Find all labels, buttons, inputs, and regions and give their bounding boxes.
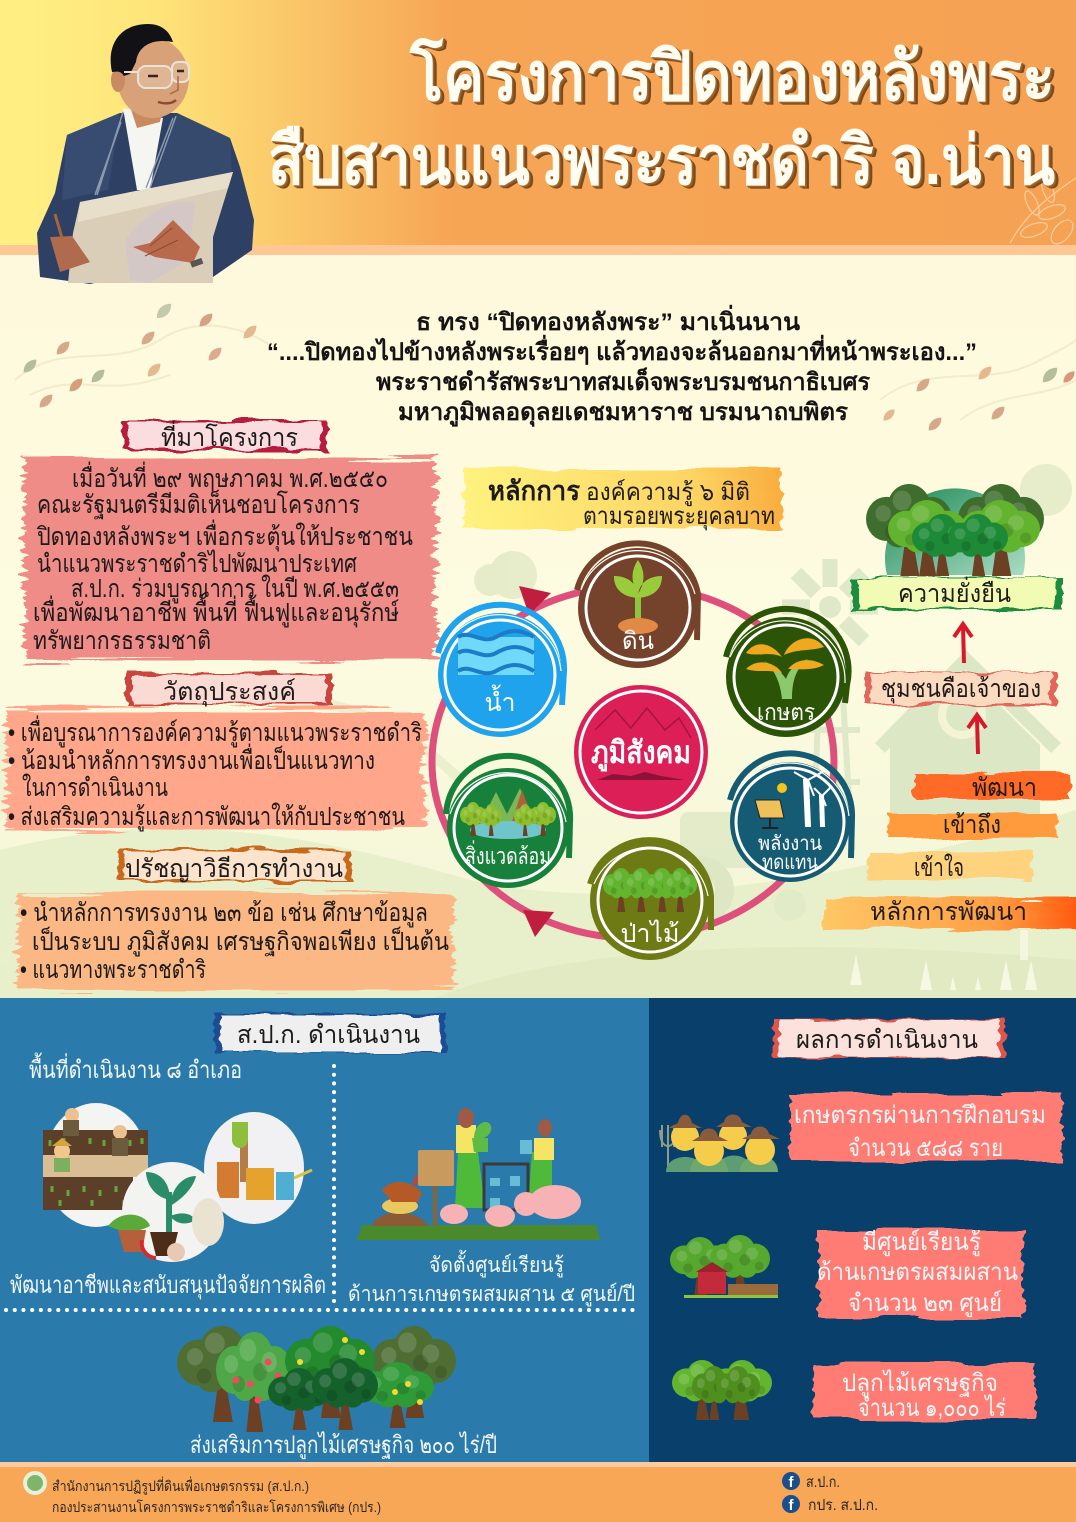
circle: agriculture: เกษตร [757, 699, 815, 725]
panel: project origin text: เมื่อวันที่ ๒๙ พฤษภาคม พ.ศ.๒๕๕๐ [72, 461, 388, 493]
sustainability trees [866, 484, 1044, 576]
text: learning centers: จัดตั้งศูนย์เรียนรู้ [429, 1250, 564, 1278]
decorative leaves left [15, 304, 270, 407]
social: ALRO facebook: ส.ป.ก. [806, 1474, 840, 1491]
royal quote: “....ปิดทองไปข้างหลังพระเรื่อยๆ แล้วทองจะล้นออกมาที่หน้าพระเอง...” [267, 334, 977, 366]
heading: project origin: ที่มาโครงการ [161, 420, 298, 452]
callout: trained farmers: เกษตรกรผ่านการฝึกอบรม [794, 1102, 1046, 1129]
bar: understand [868, 853, 1032, 882]
banner: sustainability: ความยั่งยืน [898, 576, 1011, 608]
banner: sustainability [851, 576, 1063, 610]
text: economic trees: ส่งเสริมการปลูกไม้เศรษฐกิจ ๒๐๐ ไร่/ปี [190, 1431, 497, 1460]
ring connecting six dimensions [432, 586, 834, 938]
icon: barn and trees [670, 1235, 778, 1298]
social: KPR facebook: f [788, 1497, 794, 1514]
icon: trees [672, 1360, 772, 1420]
royal quote: พระราชดำรัสพระบาทสมเด็จพระบรมชนกาธิเบศร [376, 367, 870, 396]
circle: renewable energy: พลังงาน [758, 833, 822, 855]
callout: learning centers result [817, 1228, 1024, 1318]
panel: results [649, 998, 1076, 1462]
heading: ALRO operations [214, 1013, 446, 1053]
text: organization names: กองประสานงานโครงการพระราชดำริและโครงการพิเศษ (กปร.) [52, 1499, 381, 1515]
text: organization names: สำนักงานการปฏิรูปที่ดินเพื่อเกษตรกรรม (ส.ป.ก.) [52, 1477, 309, 1495]
icon: farmers [660, 1114, 780, 1172]
royal quote: ธ ทรง “ปิดทองหลังพระ” มาเนิ่นนาน [416, 304, 801, 336]
circle: geo-social center [574, 685, 708, 819]
heading: working philosophy: ปรัชญาวิธีการทำงาน [125, 855, 343, 883]
circle: soil [577, 543, 698, 668]
panel: working philosophy text: • นำหลักการทรงงาน ๒๓ ข้อ เช่น ศึกษาข้อมูล [20, 899, 428, 928]
circle: soil: ดิน [622, 628, 654, 655]
heading: project origin [122, 420, 328, 452]
panel: objectives text: • ส่งเสริมความรู้และการพัฒนาให้กับประชาชน [8, 802, 405, 832]
text: livelihood support: พัฒนาอาชีพและสนับสนุนปัจจัยการผลิต [10, 1272, 326, 1300]
dotted dividers [6, 1066, 636, 1310]
royal quote [267, 304, 977, 428]
title [268, 37, 1055, 199]
banner: community owns: ชุมชนคือเจ้าของ [881, 675, 1041, 704]
page background [0, 0, 1076, 1000]
callout: trained farmers [790, 1094, 1062, 1162]
bar: access [888, 811, 1056, 839]
circle: environment [446, 756, 570, 888]
panel: project origin text: คณะรัฐมนตรีมีมติเห็นชอบโครงการ [37, 489, 360, 519]
panel: objectives text: • เพื่อบูรณาการองค์ความรู้ตามแนวพระราชดำริ [8, 715, 422, 748]
heading: six dimensions principle: ตามรอยพระยุคลบาท [583, 503, 775, 531]
callout: learning centers result: มีศูนย์เรียนรู้ [862, 1228, 981, 1257]
heading: results: ผลการดำเนินงาน [796, 1026, 978, 1054]
bar: development principles [824, 897, 1076, 929]
illustration: farm tools [204, 1112, 312, 1224]
bar: development principles: หลักการพัฒนา [870, 898, 1027, 926]
heading: six dimensions principle: องค์ความรู้ ๖ มิติ [586, 478, 750, 507]
background farm scene [0, 464, 1076, 1000]
social: ALRO facebook [782, 1472, 840, 1491]
text: operating area: พื้นที่ดำเนินงาน ๘ อำเภอ [29, 1052, 242, 1084]
callout: learning centers result: ด้านเกษตรผสมผสาน [817, 1259, 1018, 1286]
callout: learning centers result: จำนวน ๒๓ ศูนย์ [848, 1289, 1002, 1318]
panel: project origin text: ส.ป.ก. ร่วมบูรณาการ ในปี พ.ศ.๒๕๕๓ [71, 574, 399, 604]
circle: agriculture [726, 609, 849, 737]
heading: objectives [126, 673, 332, 707]
text: organization names [52, 1477, 381, 1515]
social: KPR facebook: กปร. ส.ป.ก. [808, 1497, 878, 1514]
panel: project origin text: นำแนวพระราชดำริไปพัฒนาประเทศ [37, 549, 357, 578]
header band [0, 0, 1076, 255]
footer band [0, 1462, 1076, 1522]
circle: renewable energy [730, 753, 852, 882]
heading: six dimensions principle: หลักการ [488, 476, 580, 506]
heading: results [773, 1019, 1005, 1058]
arrow: up to sustainability [954, 624, 972, 663]
bar: develop: พัฒนา [972, 774, 1037, 802]
royal quote: มหาภูมิพลอดุลยเดชมหาราช บรมนาถบพิตร [398, 399, 848, 428]
circle: renewable energy: ทดแทน [762, 852, 818, 874]
portrait photo [37, 24, 254, 284]
panel: project origin text [24, 458, 436, 660]
panel: project origin text: เพื่อพัฒนาอาชีพ พื้นที่ ฟื้นฟูและอนุรักษ์ [33, 594, 400, 628]
bar: understand: เข้าใจ [914, 853, 964, 882]
heading: objectives: วัตถุประสงค์ [163, 678, 296, 707]
illustration: economic trees [177, 1326, 456, 1432]
social: KPR facebook [782, 1495, 878, 1514]
text: learning centers [348, 1250, 635, 1307]
panel: project origin text: ทรัพยากรธรรมชาติ [33, 627, 211, 655]
circle: geo-social center: ภูมิสังคม [591, 735, 691, 772]
circle: environment: สิ่งแวดล้อม [465, 840, 551, 869]
bar: access: เข้าถึง [943, 811, 1001, 839]
icon: ALRO logo [23, 1471, 47, 1495]
illustration: farmers plot [43, 1103, 148, 1227]
text: learning centers: ด้านการเกษตรผสมผสาน ๕ ศูนย์/ปี [348, 1282, 635, 1307]
circle: forest [590, 840, 711, 960]
arrow: up to community [968, 715, 986, 754]
panel: working philosophy text: เป็นระบบ ภูมิสังคม เศรษฐกิจพอเพียง เป็นต้น [32, 926, 449, 957]
heading: ALRO operations: ส.ป.ก. ดำเนินงาน [237, 1021, 420, 1049]
social: ALRO facebook: f [788, 1474, 794, 1491]
illustration: learning center [357, 1108, 600, 1240]
decorative leaves in header [1010, 176, 1076, 248]
panel: objectives text [6, 710, 424, 832]
panel: ALRO operations [0, 998, 649, 1462]
panel: objectives text: • น้อมนำหลักการทรงงานเพื่อเป็นแนวทาง [8, 743, 375, 775]
callout: economic trees result [814, 1364, 1034, 1422]
circle: water [438, 605, 564, 737]
panel: project origin text: ปิดทองหลังพระฯ เพื่อกระตุ้นให้ประชาชน [37, 519, 413, 552]
callout: economic trees result: ปลูกไม้เศรษฐกิจ [842, 1369, 998, 1398]
callout: economic trees result: จำนวน ๑,๐๐๐ ไร่ [858, 1394, 1006, 1422]
decorative leaves right [880, 340, 1076, 430]
circle: forest: ป่าไม้ [621, 919, 679, 948]
panel: working philosophy text: • แนวทางพระราชดำริ [20, 956, 206, 984]
circle: water: น้ำ [484, 684, 516, 717]
bar: develop [914, 774, 1070, 802]
heading: six dimensions principle [464, 468, 782, 531]
illustration: plants and produce [108, 1162, 224, 1262]
panel: objectives text: ในการดำเนินงาน [22, 773, 168, 802]
panel: working philosophy text [18, 892, 454, 990]
callout: trained farmers: จำนวน ๕๘๘ ราย [848, 1135, 1003, 1162]
